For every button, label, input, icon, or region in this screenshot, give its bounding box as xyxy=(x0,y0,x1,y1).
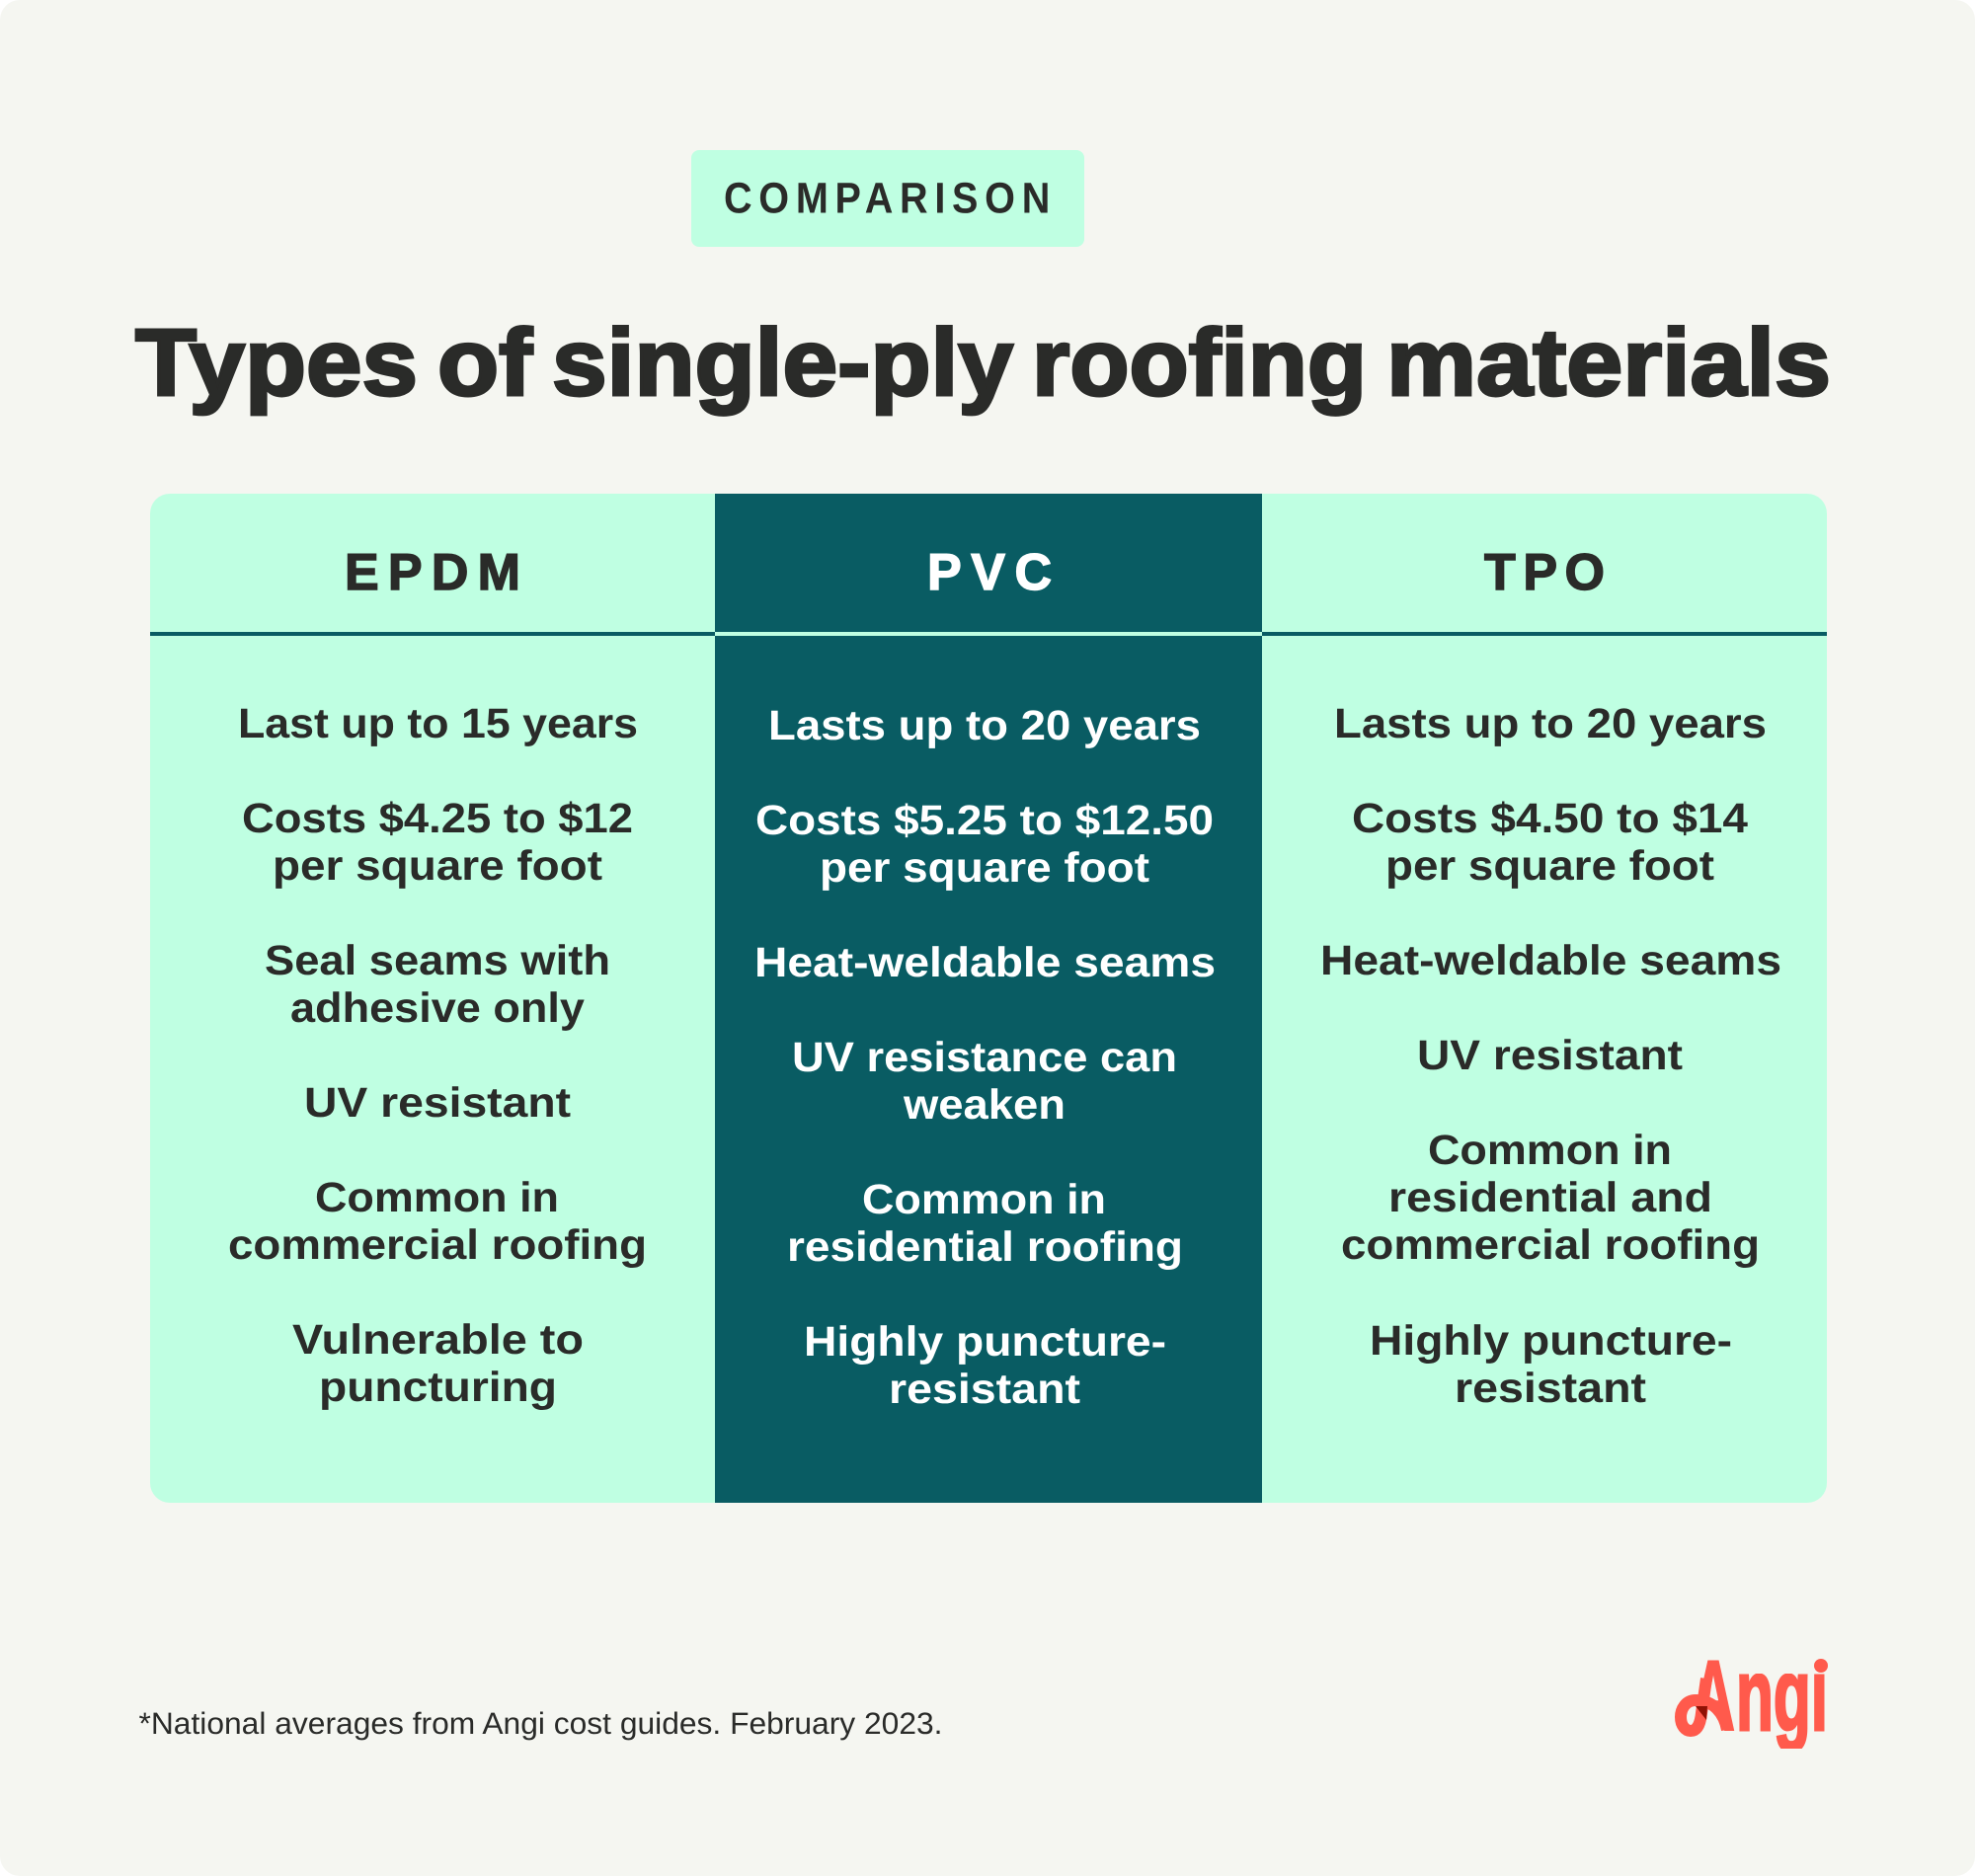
panel: TPO column: Highly puncture- xyxy=(1370,1318,1732,1365)
footnote: *National averages from Angi cost guides. February 2023. xyxy=(138,1706,942,1741)
panel: EPDM column: Common in xyxy=(315,1175,559,1221)
title: single-ply xyxy=(552,310,1013,416)
title: of xyxy=(437,310,533,416)
panel: PVC column: per square foot xyxy=(820,845,1149,892)
panel: TPO column: UV resistant xyxy=(1417,1033,1683,1079)
panel: PVC column: weaken xyxy=(903,1082,1066,1129)
panel: TPO column: resistant xyxy=(1455,1366,1646,1412)
panel: PVC column: PVC xyxy=(927,544,1052,601)
panel: EPDM column: Seal seams with xyxy=(265,938,610,984)
panel: EPDM column xyxy=(150,544,715,1411)
logo: Angi xyxy=(1675,1659,1828,1749)
panel: EPDM column: Costs $4.25 to $12 xyxy=(242,796,633,842)
badge: comparison xyxy=(691,150,1084,247)
panel: PVC column: Common in xyxy=(862,1177,1106,1223)
panel: PVC column: Costs $5.25 to $12.50 xyxy=(755,798,1214,844)
panel: EPDM column: UV resistant xyxy=(304,1080,571,1127)
panel: TPO column: residential and xyxy=(1388,1175,1712,1221)
logo: Angi: A xyxy=(1692,1641,1735,1752)
panel: PVC column: resistant xyxy=(889,1367,1080,1413)
panel: TPO column: Lasts up to 20 years xyxy=(1334,701,1767,747)
panel: TPO column: Heat-weldable seams xyxy=(1320,938,1781,984)
title: Types xyxy=(135,310,418,416)
panel: EPDM column: EPDM xyxy=(345,544,520,601)
panel: TPO column: TPO xyxy=(1484,544,1605,601)
panel: TPO column: per square foot xyxy=(1385,843,1714,890)
panel: TPO column: commercial roofing xyxy=(1341,1222,1760,1269)
panel: EPDM column: puncturing xyxy=(319,1365,557,1411)
panel: PVC column: Lasts up to 20 years xyxy=(768,703,1201,749)
panel: EPDM column: adhesive only xyxy=(290,985,585,1032)
title: roofing xyxy=(1032,310,1367,416)
panel: EPDM column: per square foot xyxy=(273,843,602,890)
panel: EPDM column: Vulnerable to xyxy=(292,1317,584,1364)
panel: PVC column: Heat-weldable seams xyxy=(754,940,1216,986)
panel: PVC column: residential roofing xyxy=(787,1224,1183,1271)
comparison table xyxy=(150,494,1827,1503)
panel: TPO column xyxy=(1262,544,1827,1412)
panel: PVC column: UV resistance can xyxy=(792,1035,1177,1081)
badge: comparison: COMPARISON xyxy=(724,174,1050,223)
panel: TPO column: Common in xyxy=(1428,1128,1672,1174)
logo: Angi: ngi xyxy=(1736,1638,1828,1753)
panel: EPDM column: commercial roofing xyxy=(228,1222,647,1269)
panel: PVC column xyxy=(715,494,1262,1503)
panel: PVC column: Highly puncture- xyxy=(804,1319,1166,1366)
panel: EPDM column: Last up to 15 years xyxy=(238,701,638,747)
panel: TPO column: Costs $4.50 to $14 xyxy=(1352,796,1748,842)
title xyxy=(135,310,1831,416)
title: materials xyxy=(1386,310,1831,416)
